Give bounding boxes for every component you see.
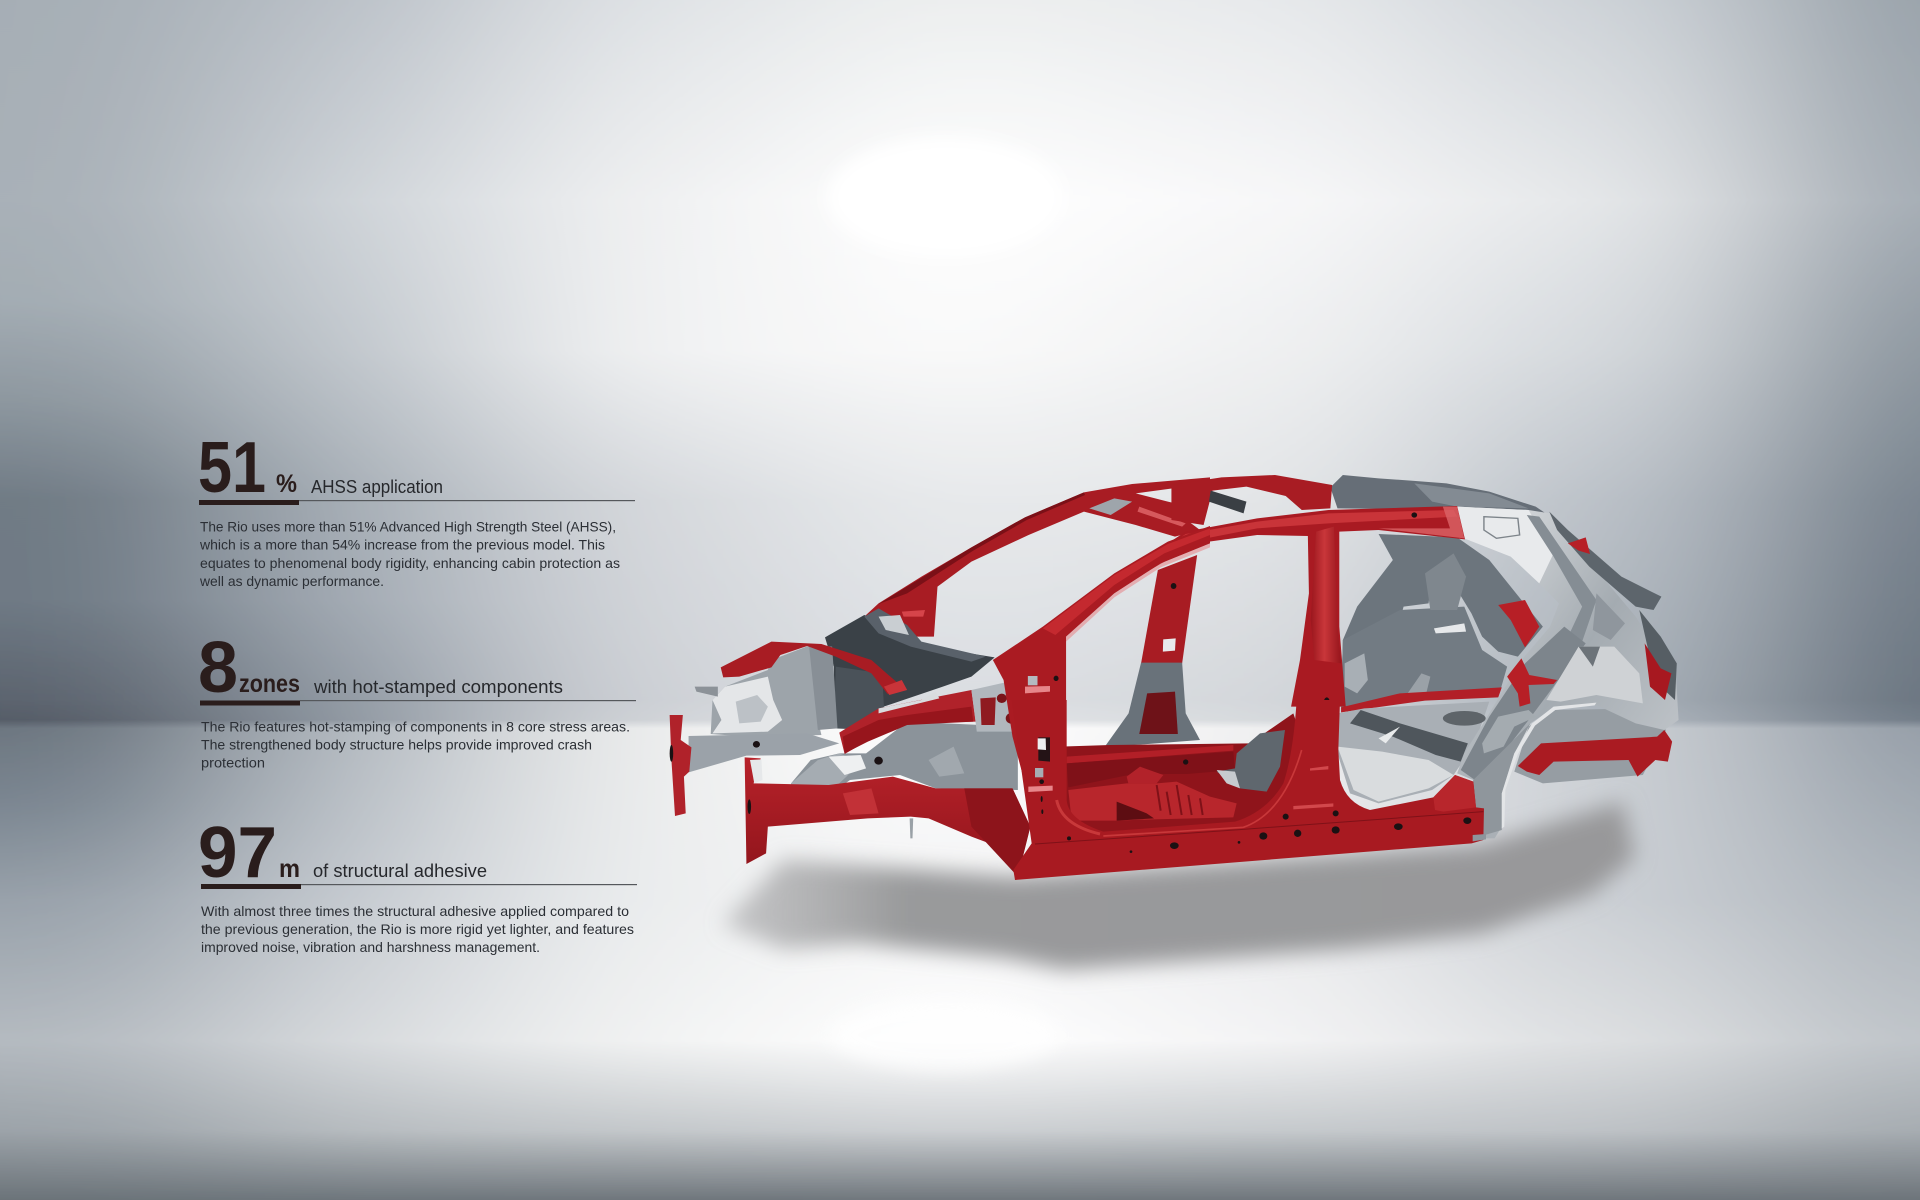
stat block: 51% AHSS application [198,428,635,589]
front section: engine bay, rails and near A-pillar [670,526,1210,877]
stat block: 8 zones with hot-stamped components: The Rio features hot-stamping of components in 8 core stress areas. [201,719,630,735]
stat block: 51% AHSS application: equates to phenomenal body rigidity, enhancing cabin protection as [200,555,620,571]
stat block: 8 zones with hot-stamped components: The strengthened body structure helps provide improved crash [201,737,592,753]
rear tail dark panel [1549,512,1661,610]
rear section: interior panels and rear quarter [1150,475,1679,838]
front grey beam and bumper [689,733,839,772]
front silver strut tower [711,645,821,737]
stat block: 8 zones with hot-stamped components: with hot-stamped components [313,676,563,697]
small pin under rail [910,818,913,838]
stat block: 97 m of structural adhesive: the previous generation, the Rio is more rigid yet lighter, and features [201,921,634,937]
silver rear floor [1337,702,1489,803]
car body-in-white illustration [670,475,1679,880]
near roof rail and upper B-pillar [1150,506,1465,707]
silver bracket [971,683,1021,732]
stat block: 51% AHSS application: which is a more than 54% increase from the previous model. This [199,537,605,553]
stat block: 51% AHSS application: AHSS application [311,476,443,497]
near upper rail [839,690,976,754]
stat block: 97 m of structural adhesive: With almost three times the structural adhesive applied compared to [201,903,629,919]
wheel well and inner rear [1514,708,1666,783]
roof rear panels [1330,475,1548,515]
floor red cross member [1341,687,1502,712]
rear quarter panel [1457,507,1679,838]
stat block: 97 m of structural adhesive: of structural adhesive [313,860,487,881]
stat block: 51% AHSS application: well as dynamic performance. [199,573,384,589]
lower near side frame: sill and door curves [1012,700,1486,880]
stat block: 97 m of structural adhesive: 97 [198,813,277,893]
stat block: 8 zones with hot-stamped components: 8 [198,628,238,708]
cabin floor seen through the front door opening [1060,713,1300,840]
dark firewall [825,615,995,728]
near wheelhouse grey [791,722,1018,804]
near A-pillar and upper post [993,526,1210,797]
rear sill end [1473,834,1486,841]
lower red rail [745,757,1030,877]
far side roof rail [1171,475,1332,525]
stat block: 97 m of structural adhesive: improved noise, vibration and harshness management. [201,939,540,955]
stat block: 97 m of structural adhesive: m [279,855,300,883]
red rear rail [1518,730,1672,777]
front upper red strut [721,642,902,694]
stat block: 51% AHSS application: The Rio uses more than 51% Advanced High Strength Steel (AHSS), [200,518,616,534]
rear red accents [1568,537,1590,554]
stat block: 8 zones with hot-stamped components: zones [239,670,300,698]
car shadow on floor [722,802,1635,970]
far side of the cabin: A-pillar, roof header and B-pillar [864,477,1210,747]
stat block: 51% AHSS application: 51 [198,428,266,508]
stat block: 8 zones with hot-stamped components [198,628,636,771]
stat block: 97 m of structural adhesive [198,813,637,955]
stat block: 51% AHSS application: % [276,470,297,498]
stat block: 8 zones with hot-stamped components: protection [201,755,265,771]
rear interior grey panel [1341,534,1543,708]
